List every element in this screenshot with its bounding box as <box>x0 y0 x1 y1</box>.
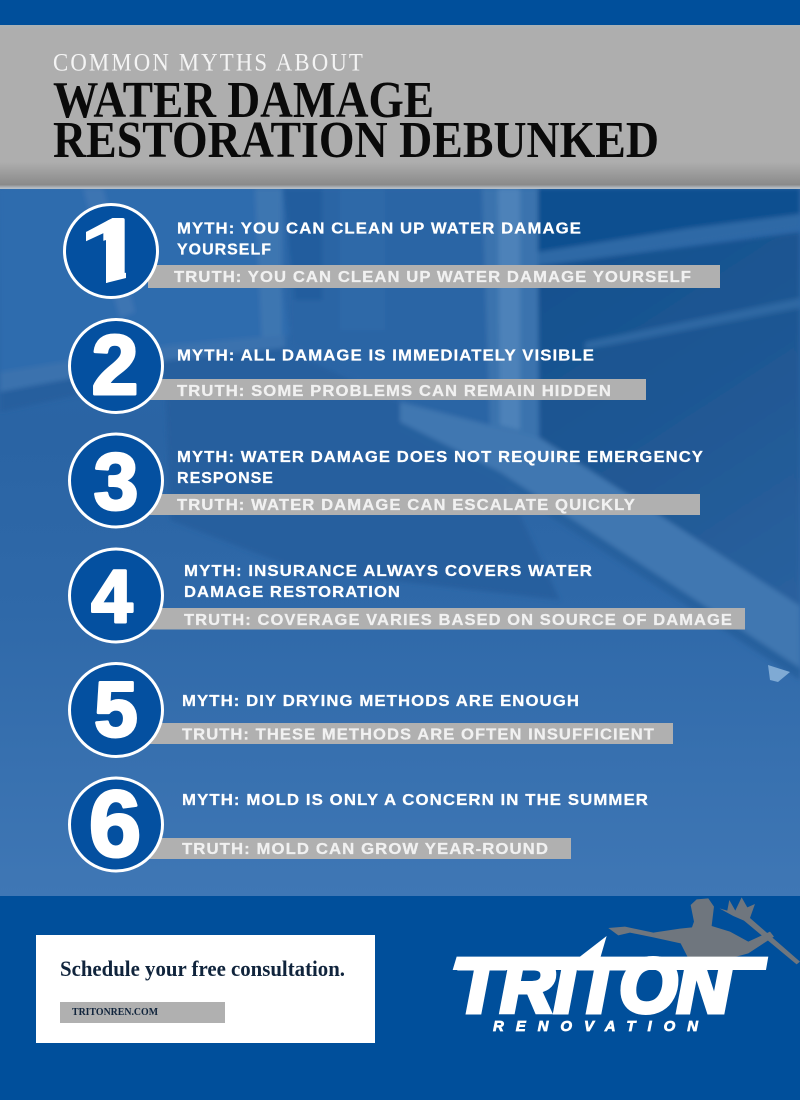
badge 6 <box>70 771 162 876</box>
truth bar 4 <box>150 608 745 630</box>
logo tagline: RENOVATION <box>493 1018 699 1035</box>
truth 4 text: TRUTH: COVERAGE VARIES BASED ON SOURCE OF DAMAGE <box>184 612 733 629</box>
myth 5 <box>70 664 673 756</box>
call to action heading: Schedule your free consultation. <box>60 956 345 981</box>
myth 4 text: DAMAGE RESTORATION <box>184 584 401 601</box>
badge 5 <box>70 664 162 756</box>
website pill <box>60 1002 225 1023</box>
truth 6 text: TRUTH: MOLD CAN GROW YEAR-ROUND <box>182 841 549 858</box>
myth 1 text: MYTH: YOU CAN CLEAN UP WATER DAMAGE <box>177 220 582 238</box>
badge 6: 6 <box>89 771 141 876</box>
myth 4 <box>70 549 745 642</box>
website text: TRITONREN.COM <box>72 1006 159 1018</box>
title line 1: WATER DAMAGE <box>53 72 434 129</box>
truth bar 5 <box>150 723 673 744</box>
myth 4 text: MYTH: INSURANCE ALWAYS COVERS WATER <box>184 563 593 580</box>
myth 3 text: MYTH: WATER DAMAGE DOES NOT REQUIRE EMERGENCY <box>177 449 704 466</box>
badge 3 <box>70 434 162 527</box>
myth 3 text: RESPONSE <box>177 470 274 487</box>
truth 3 text: TRUTH: WATER DAMAGE CAN ESCALATE QUICKLY <box>177 497 636 514</box>
truth bar 3 <box>150 494 700 515</box>
myth 5 text: MYTH: DIY DRYING METHODS ARE ENOUGH <box>182 693 580 710</box>
myth 2 <box>70 318 646 412</box>
badge 5: 5 <box>94 665 138 753</box>
myth 1 <box>64 199 720 304</box>
badge 2 <box>70 318 162 412</box>
myth 6 text: MYTH: MOLD IS ONLY A CONCERN IN THE SUMMER <box>182 792 649 809</box>
truth 5 text: TRUTH: THESE METHODS ARE OFTEN INSUFFICIENT <box>182 726 655 744</box>
title line 2: RESTORATION DEBUNKED <box>53 112 659 169</box>
truth bar 6 <box>150 838 571 859</box>
badge 4 <box>70 549 162 642</box>
logo wordmark: TRITON <box>455 944 733 1029</box>
truth 1 text: TRUTH: YOU CAN CLEAN UP WATER DAMAGE YOURSELF <box>174 269 692 286</box>
background photo: blue tinted water damaged framing <box>0 188 800 896</box>
truth bar 2 <box>150 379 646 400</box>
logo top bar and lightning <box>453 936 768 970</box>
badge 2: 2 <box>92 318 138 412</box>
badge 1: 1 <box>76 199 146 304</box>
badge 4: 4 <box>91 555 133 638</box>
logo: Triton Renovation <box>453 897 800 1035</box>
truth 2 text: TRUTH: SOME PROBLEMS CAN REMAIN HIDDEN <box>177 383 612 400</box>
myth 2 text: MYTH: ALL DAMAGE IS IMMEDIATELY VISIBLE <box>177 348 595 364</box>
header kicker: COMMON MYTHS ABOUT <box>53 48 365 76</box>
myth 1 text: YOURSELF <box>177 242 272 258</box>
call to action card <box>36 935 375 1043</box>
truth bar 1 <box>148 265 720 288</box>
badge 3: 3 <box>94 437 138 526</box>
myth 3 <box>70 434 704 527</box>
myth 6 <box>70 771 649 876</box>
background: top blue band <box>0 0 800 25</box>
header panel <box>0 25 800 189</box>
footer band <box>0 896 800 1100</box>
badge 1 <box>64 199 158 304</box>
icon: trident figure <box>608 897 800 964</box>
